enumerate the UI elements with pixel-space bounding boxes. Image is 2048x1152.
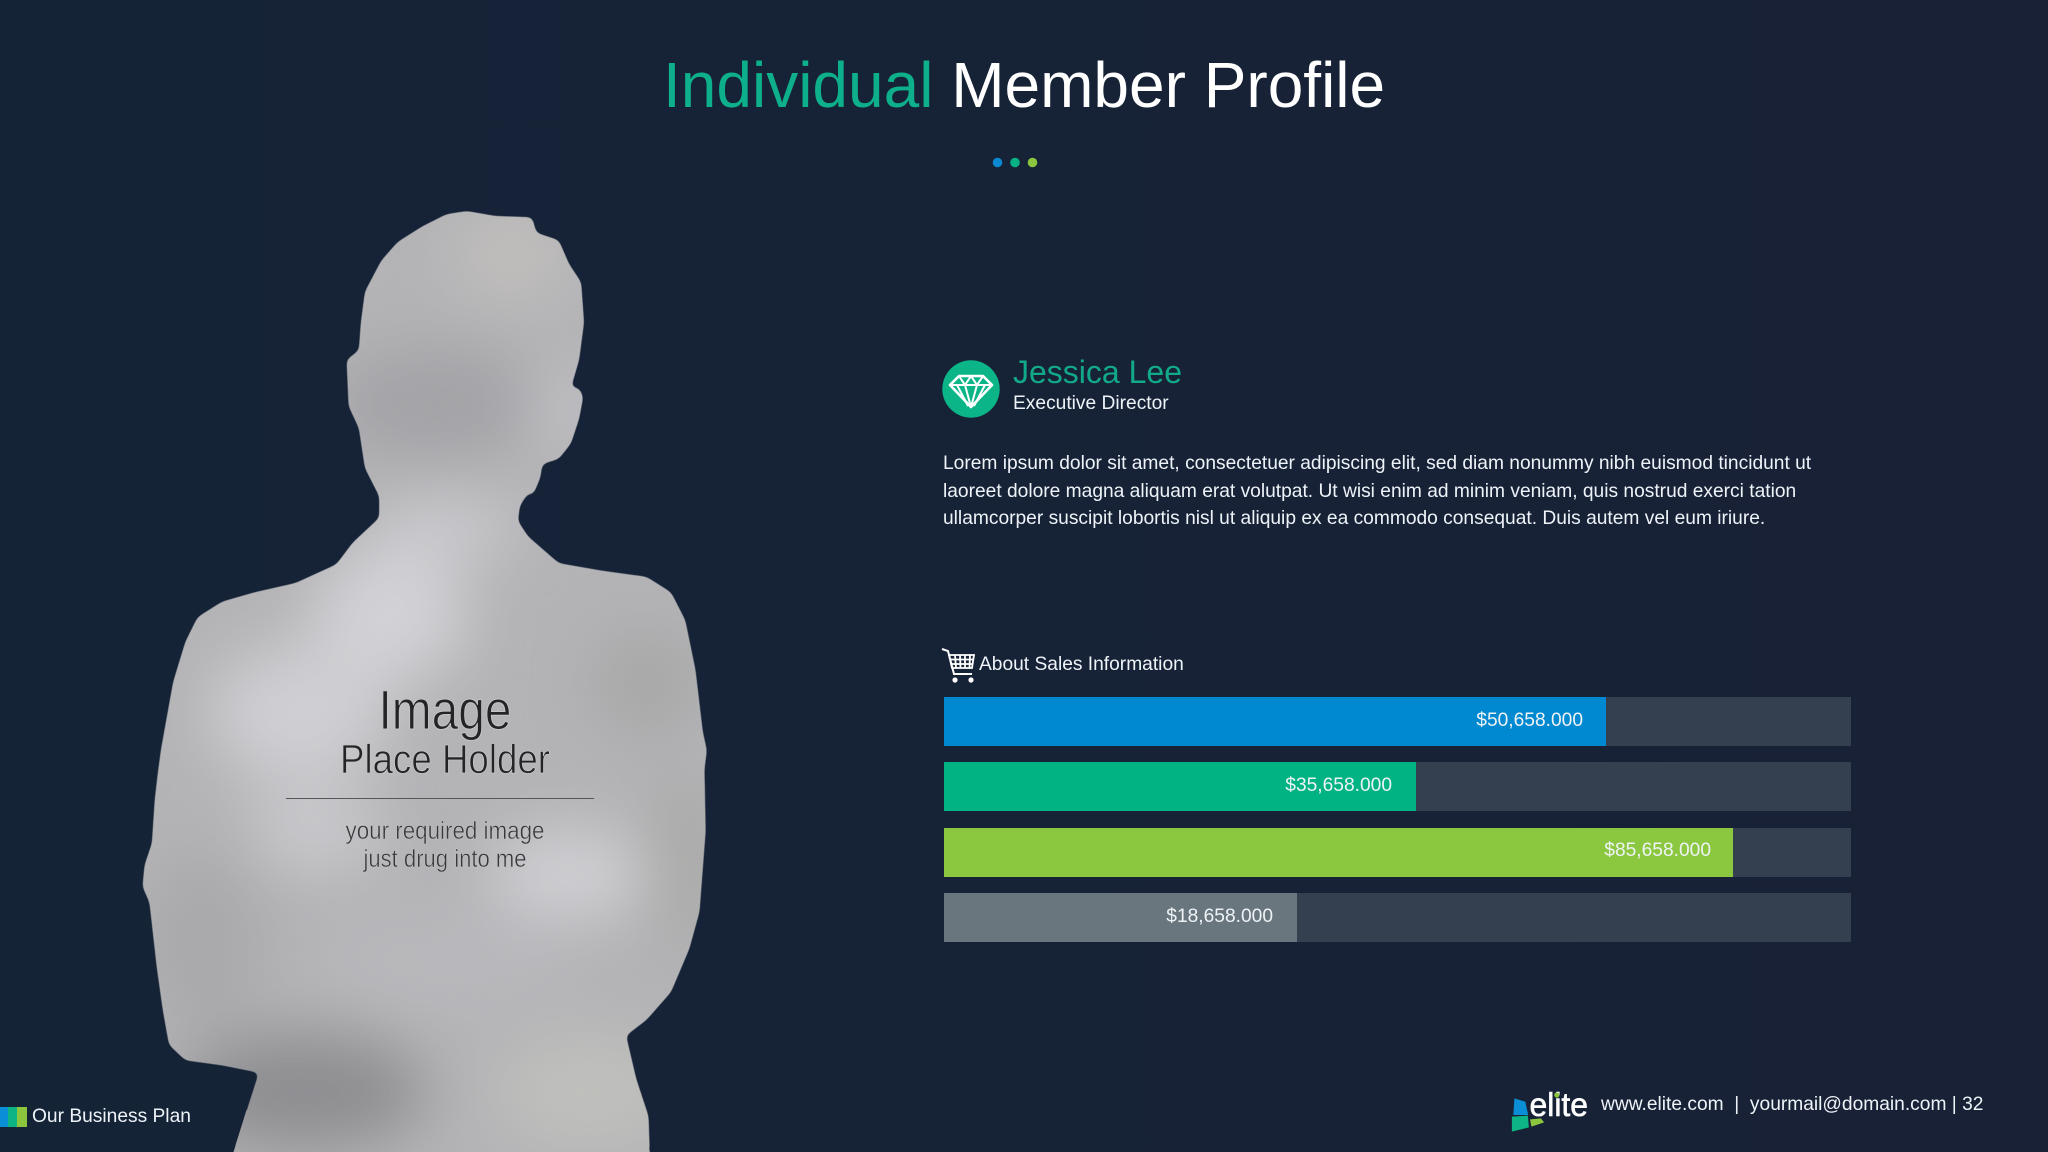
icon: diamond badge: [942, 360, 1000, 418]
bar 1: $50,658.000: [944, 697, 1851, 746]
bar 4: $18,658.000: [944, 893, 1851, 942]
decorative title dots: [992, 158, 1038, 168]
placeholder divider: [286, 798, 594, 799]
bar 1: $50,658.000: $50,658.000: [1476, 710, 1583, 731]
logo: elite: elite: [1530, 1086, 1588, 1123]
title: Individual Member Profile: [663, 49, 1385, 121]
bar chart: sales: [944, 697, 1851, 942]
bar 3: $85,658.000: [944, 828, 1851, 877]
footer mark: color squares: [0, 1107, 27, 1127]
placeholder caption: [346, 817, 544, 873]
bar 2: $35,658.000: $35,658.000: [1285, 775, 1392, 796]
bar 4: $18,658.000: $18,658.000: [1166, 906, 1273, 927]
role: Executive Director: [1013, 393, 1169, 414]
description paragraph: [943, 453, 1811, 529]
description paragraph: Lorem ipsum dolor sit amet, consectetuer adipiscing elit, sed diam nonummy nibh euismod tincidunt ut: [943, 453, 1811, 474]
image placeholder silhouette: [142, 211, 707, 1152]
placeholder caption: just drug into me: [363, 845, 526, 873]
bar 3: $85,658.000: $85,658.000: [1604, 840, 1711, 861]
placeholder caption: your required image: [346, 817, 544, 845]
description paragraph: ullamcorper suscipit lobortis nisl ut aliquip ex ea commodo consequat. Duis autem vel eum iriure.: [943, 508, 1765, 529]
icon: shopping cart: [942, 648, 975, 683]
description paragraph: laoreet dolore magna aliquam erat volutpat. Ut wisi enim ad minim veniam, quis nostrud exerci tation: [943, 480, 1796, 502]
placeholder heading: Image: Image: [378, 678, 512, 741]
bar 2: $35,658.000: [944, 762, 1851, 811]
footer left label: Our Business Plan: [32, 1106, 191, 1127]
sales heading: About Sales Information: [979, 654, 1184, 675]
logo: elite: [1512, 1086, 1588, 1132]
name: Jessica Lee: [1013, 354, 1182, 390]
footer contact and page number: www.elite.com | yourmail@domain.com | 32: [1601, 1094, 1983, 1115]
